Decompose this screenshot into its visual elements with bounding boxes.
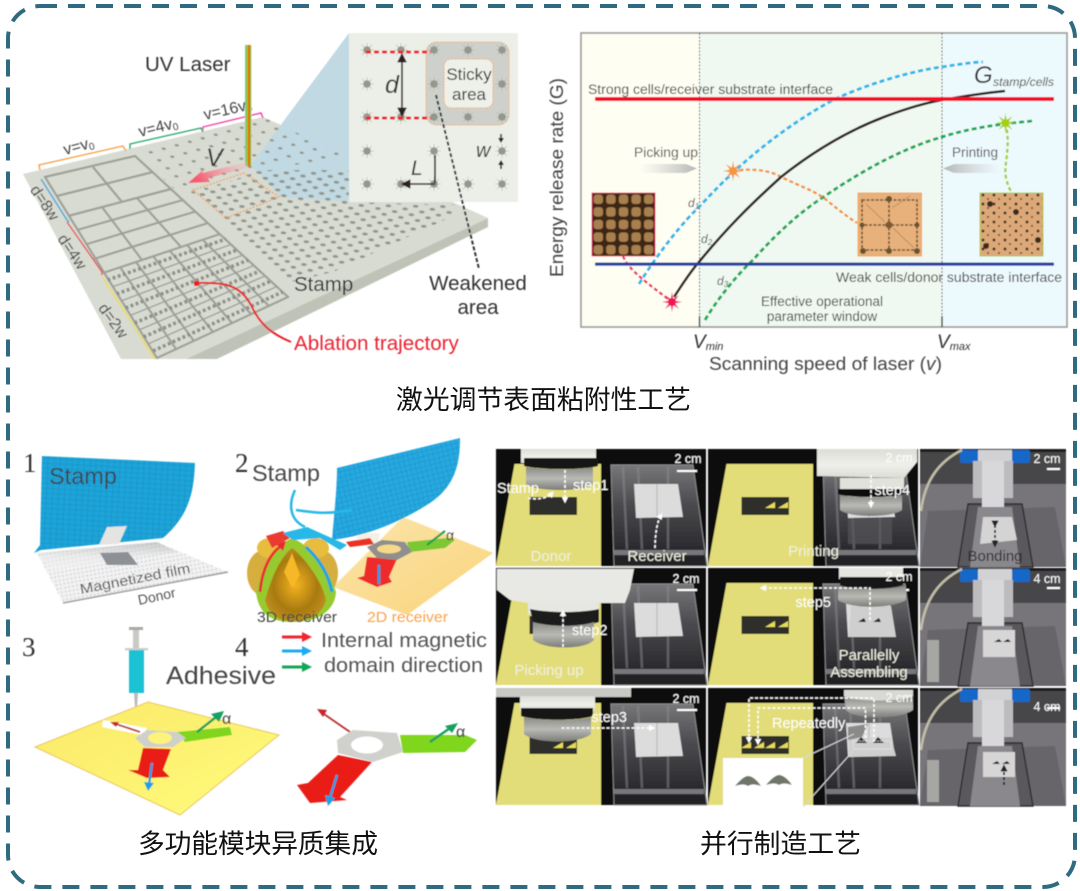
step 4: bonded module [297,709,477,806]
step 2: transfer to receivers: Stamp [252,460,320,486]
3D receiver sphere [247,490,352,622]
photo: step1 donor and receiver: step1 [573,478,608,494]
label: weak interface: Weak cells/donor substrate interface [836,270,1062,285]
panel: multifunctional module integration [22,438,493,815]
curve labels d1 d2 d3: 1 [695,202,699,211]
sticky area label: area [452,85,487,104]
dimension d [385,56,402,114]
hexagon module and arms: α [446,527,454,543]
speed and spacing labels: d=8w [26,182,62,224]
photo: step1 donor and receiver: Receiver [627,548,687,565]
photo: final bonded: 4 cm [1033,700,1061,714]
photo: step3 transfer [496,688,707,805]
scan direction arrow V [188,144,247,183]
photo: step5 parallel assembling: 2 cm [885,570,913,584]
label: G stamp/cells: stamp/cells [993,75,1054,89]
step 1: film on donor: Donor [136,584,177,608]
blue stamp sheet 2 [332,438,460,540]
sticky area outer [426,42,509,125]
photo: step5 parallel assembling: Assembling [830,664,908,681]
label: effective operational window: parameter window [767,309,877,324]
photo: step1 donor and receiver [496,449,707,566]
ablation trajectory callout [194,281,460,355]
dimension d: d [385,71,400,99]
curve labels d1 d2 d3: 2 [707,238,713,247]
speed and spacing labels [26,96,254,342]
speed and spacing labels: v=16v [202,98,248,124]
scan direction arrow V: V [206,144,225,172]
photo: step4 printing: step4 [874,483,910,499]
line: weak interface [595,262,1054,266]
speed and spacing labels: 0 [246,103,254,115]
step 3: adhesive on yellow receiver [35,702,279,815]
sticky area label [444,59,493,108]
stamp slab [23,33,488,359]
sticky area label: Sticky [446,65,492,84]
heading: parallel manufacturing: 并行制造工艺 [700,829,861,859]
label: strong interface: Strong cells/receiver substrate interface [588,82,833,97]
step number 4: 4 [235,632,249,662]
photo: bonding [920,449,1066,567]
photo: bonding: 2 cm [1033,452,1061,466]
photo: step1 donor and receiver: Donor [531,548,571,565]
star markers [662,113,1016,312]
hexagon module and arms [346,527,455,587]
label: Adhesive: Adhesive [166,662,276,690]
x axis ticks vmin vmax: V [937,332,950,353]
photo: step2 picking up: step2 [572,623,607,639]
zoom inset with two modules [723,734,854,807]
photo: repeated assembly with inset: 2 cm [885,691,913,705]
photo: repeated assembly with inset: Repeatedly [772,716,846,732]
panel: parallel manufacturing photo grid [496,449,1066,807]
step 1: film on donor: Magnetized film [79,560,192,597]
x axis ticks vmin vmax: min [706,341,723,353]
micrograph: effective state [858,193,922,256]
picking up arrow [634,145,698,173]
speed and spacing labels: d=4w [54,231,90,273]
line: blue dashed d1 curve [639,62,983,284]
photo: step1 donor and receiver: 2 cm [674,452,702,466]
x axis title: Scanning speed of laser ( v) [709,353,942,374]
line: strong interface [595,97,1054,101]
step 2: transfer to receivers: 2D receiver [367,610,448,626]
dimension w [476,134,504,169]
photo: step4 printing [708,449,919,566]
x axis ticks vmin vmax [693,332,971,353]
photo: step5 parallel assembling: step5 [796,595,831,611]
photo: step4 printing: Printing [788,543,839,560]
red dashed spacing lines [366,52,431,118]
label: G stamp/cells [974,62,1054,89]
photo: step2 picking up [496,568,707,685]
label: effective operational window: Effective operational [761,294,883,309]
label: effective operational window [761,294,883,324]
label: UV Laser: UV Laser [145,53,231,76]
label: G stamp/cells: G [974,62,993,89]
photo: repeated assembly with inset [708,688,919,807]
legend: internal magnetic domain direction [282,630,487,677]
curve labels d1 d2 d3: d [688,196,695,210]
2D receiver sheet [333,517,493,615]
photo: step3 transfer: 2 cm [672,692,700,706]
syringe icon [125,627,148,722]
speed and spacing labels: 0 [88,141,97,153]
dimension w: w [476,140,492,162]
step 1: film on donor: Stamp [49,463,117,489]
weakened area callout: Weakened [429,272,527,295]
legend: internal magnetic domain direction: domain direction [324,655,483,677]
weakened area callout: area [457,296,499,319]
curve labels d1 d2 d3 [688,196,729,289]
photo: step1 donor and receiver: Stamp [497,481,539,497]
step 1: film on donor [34,456,228,608]
speed and spacing labels: 0 [172,121,180,134]
orange dashed region [193,173,279,218]
step 4: bonded module: α [456,724,465,741]
line: pink connector [623,256,672,302]
chart background zones [581,33,1067,327]
legend: internal magnetic domain direction: Internal magnetic [321,630,487,652]
curve labels d1 d2 d3: 3 [724,280,729,289]
photo: step2 picking up: 2 cm [672,572,700,586]
step 2: transfer to receivers: 3D receiver [257,610,337,626]
speed and spacing labels: v=v [62,136,91,159]
photo: step4 printing: 2 cm [885,451,913,465]
panel: energy release rate chart [547,33,1067,374]
photo: bonding: Bonding [967,548,1023,565]
dimension L [404,155,435,184]
step number 1: 1 [23,448,36,478]
step 2: transfer to receivers [247,438,493,626]
hole grid [360,43,509,191]
label: Stamp: Stamp [294,273,353,296]
micrograph: picking state [592,193,655,256]
step number 3: 3 [22,632,36,662]
speed and spacing labels: v=4v [137,116,174,141]
panel: laser stamp illustration [23,33,527,359]
photo: step3 transfer: step3 [592,710,627,726]
line: lime connector [1005,123,1012,193]
line: orange connector [733,170,857,223]
photo: step2 picking up: Picking up [514,662,584,679]
curve labels d1 d2 d3: d [717,274,724,288]
micrograph: printing state [980,193,1043,256]
step number 2: 2 [235,448,248,478]
printing arrow [943,145,1001,173]
x axis ticks vmin vmax: V [693,332,706,353]
heading: multifunctional module integration: 多功能模块异质集成 [138,829,378,859]
inset: hole detail [349,33,518,202]
line: G stamp/cells curve [674,91,1005,297]
speed and spacing labels: d=2w [94,301,131,342]
photo: final bonded [920,688,1066,806]
photo: alignment check: 4 cm [1033,572,1061,586]
photo: alignment check [920,568,1066,686]
line: green dashed d3 curve [705,121,1032,320]
laser beam [245,45,252,166]
y axis title: Energy release rate (G) [547,78,567,277]
x axis ticks vmin vmax: max [950,341,971,353]
curve labels d1 d2 d3: d [701,232,708,246]
speed brackets [39,113,263,359]
photo: step5 parallel assembling: Parallelly [839,647,900,664]
dimension L: L [411,157,423,180]
printing arrow: Printing [952,145,998,160]
step 3: adhesive on yellow receiver: α [222,711,231,728]
weakened area callout [429,95,527,319]
photo: step5 parallel assembling [708,568,919,685]
picking up arrow: Picking up [634,145,698,160]
heading: laser adhesion process: 激光调节表面粘附性工艺 [396,385,691,415]
ablated groove grid [45,156,288,358]
ablation trajectory callout: Ablation trajectory [294,332,460,355]
